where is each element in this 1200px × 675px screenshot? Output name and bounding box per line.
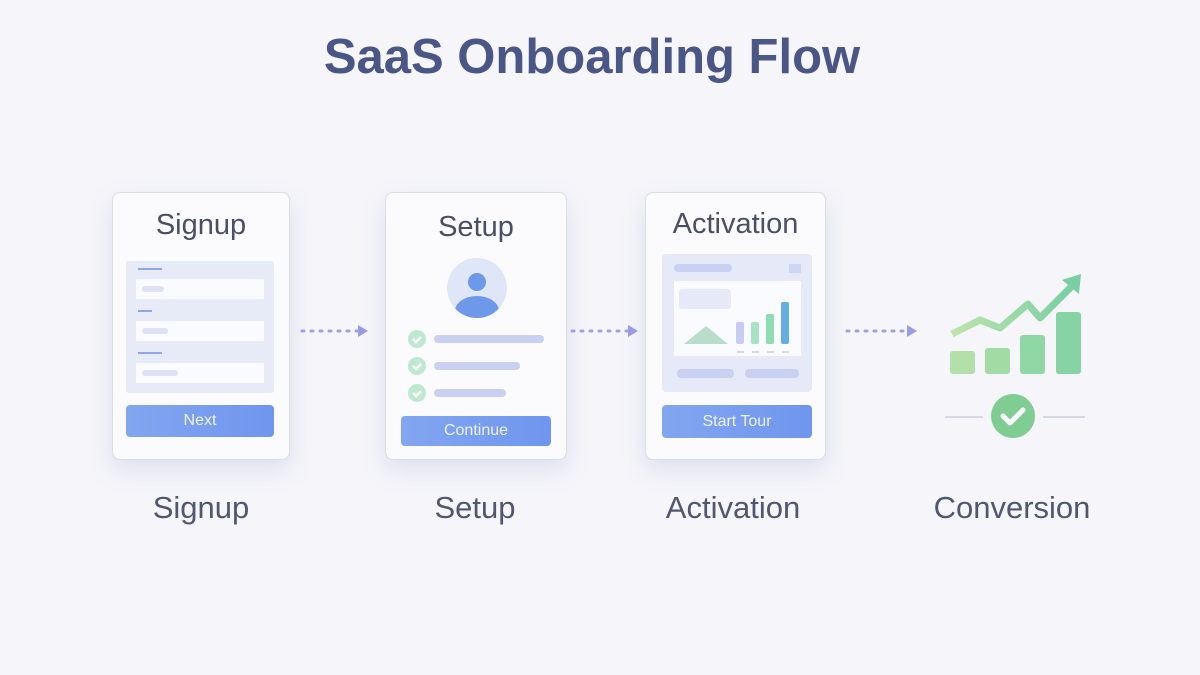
label: setup: Setup [434,490,516,525]
arrow 1 [300,325,368,337]
button: start tour [662,405,812,438]
label: conversion: Conversion [934,490,1090,525]
icon: avatar [447,258,507,318]
icon: conversion growth chart [945,274,1085,438]
panel: setup card [385,192,567,460]
heading: activation: Activation [673,208,798,240]
title: SaaS Onboarding Flow [324,30,860,84]
panel: activation card [645,192,826,460]
button: next: Next [184,412,216,429]
checklist [408,330,544,402]
button: continue: Continue [444,422,508,439]
button: next [126,405,274,437]
arrow 2 [570,325,638,337]
panel: signup card [112,192,290,460]
button: start tour: Start Tour [702,413,772,430]
label: signup: Signup [153,490,249,525]
form [126,261,274,393]
heading: setup: Setup [438,211,514,243]
button: continue [401,416,551,446]
label: activation: Activation [666,490,800,525]
heading: signup: Signup [156,209,246,241]
arrow 3 [846,325,917,337]
dashboard screen [662,254,812,392]
